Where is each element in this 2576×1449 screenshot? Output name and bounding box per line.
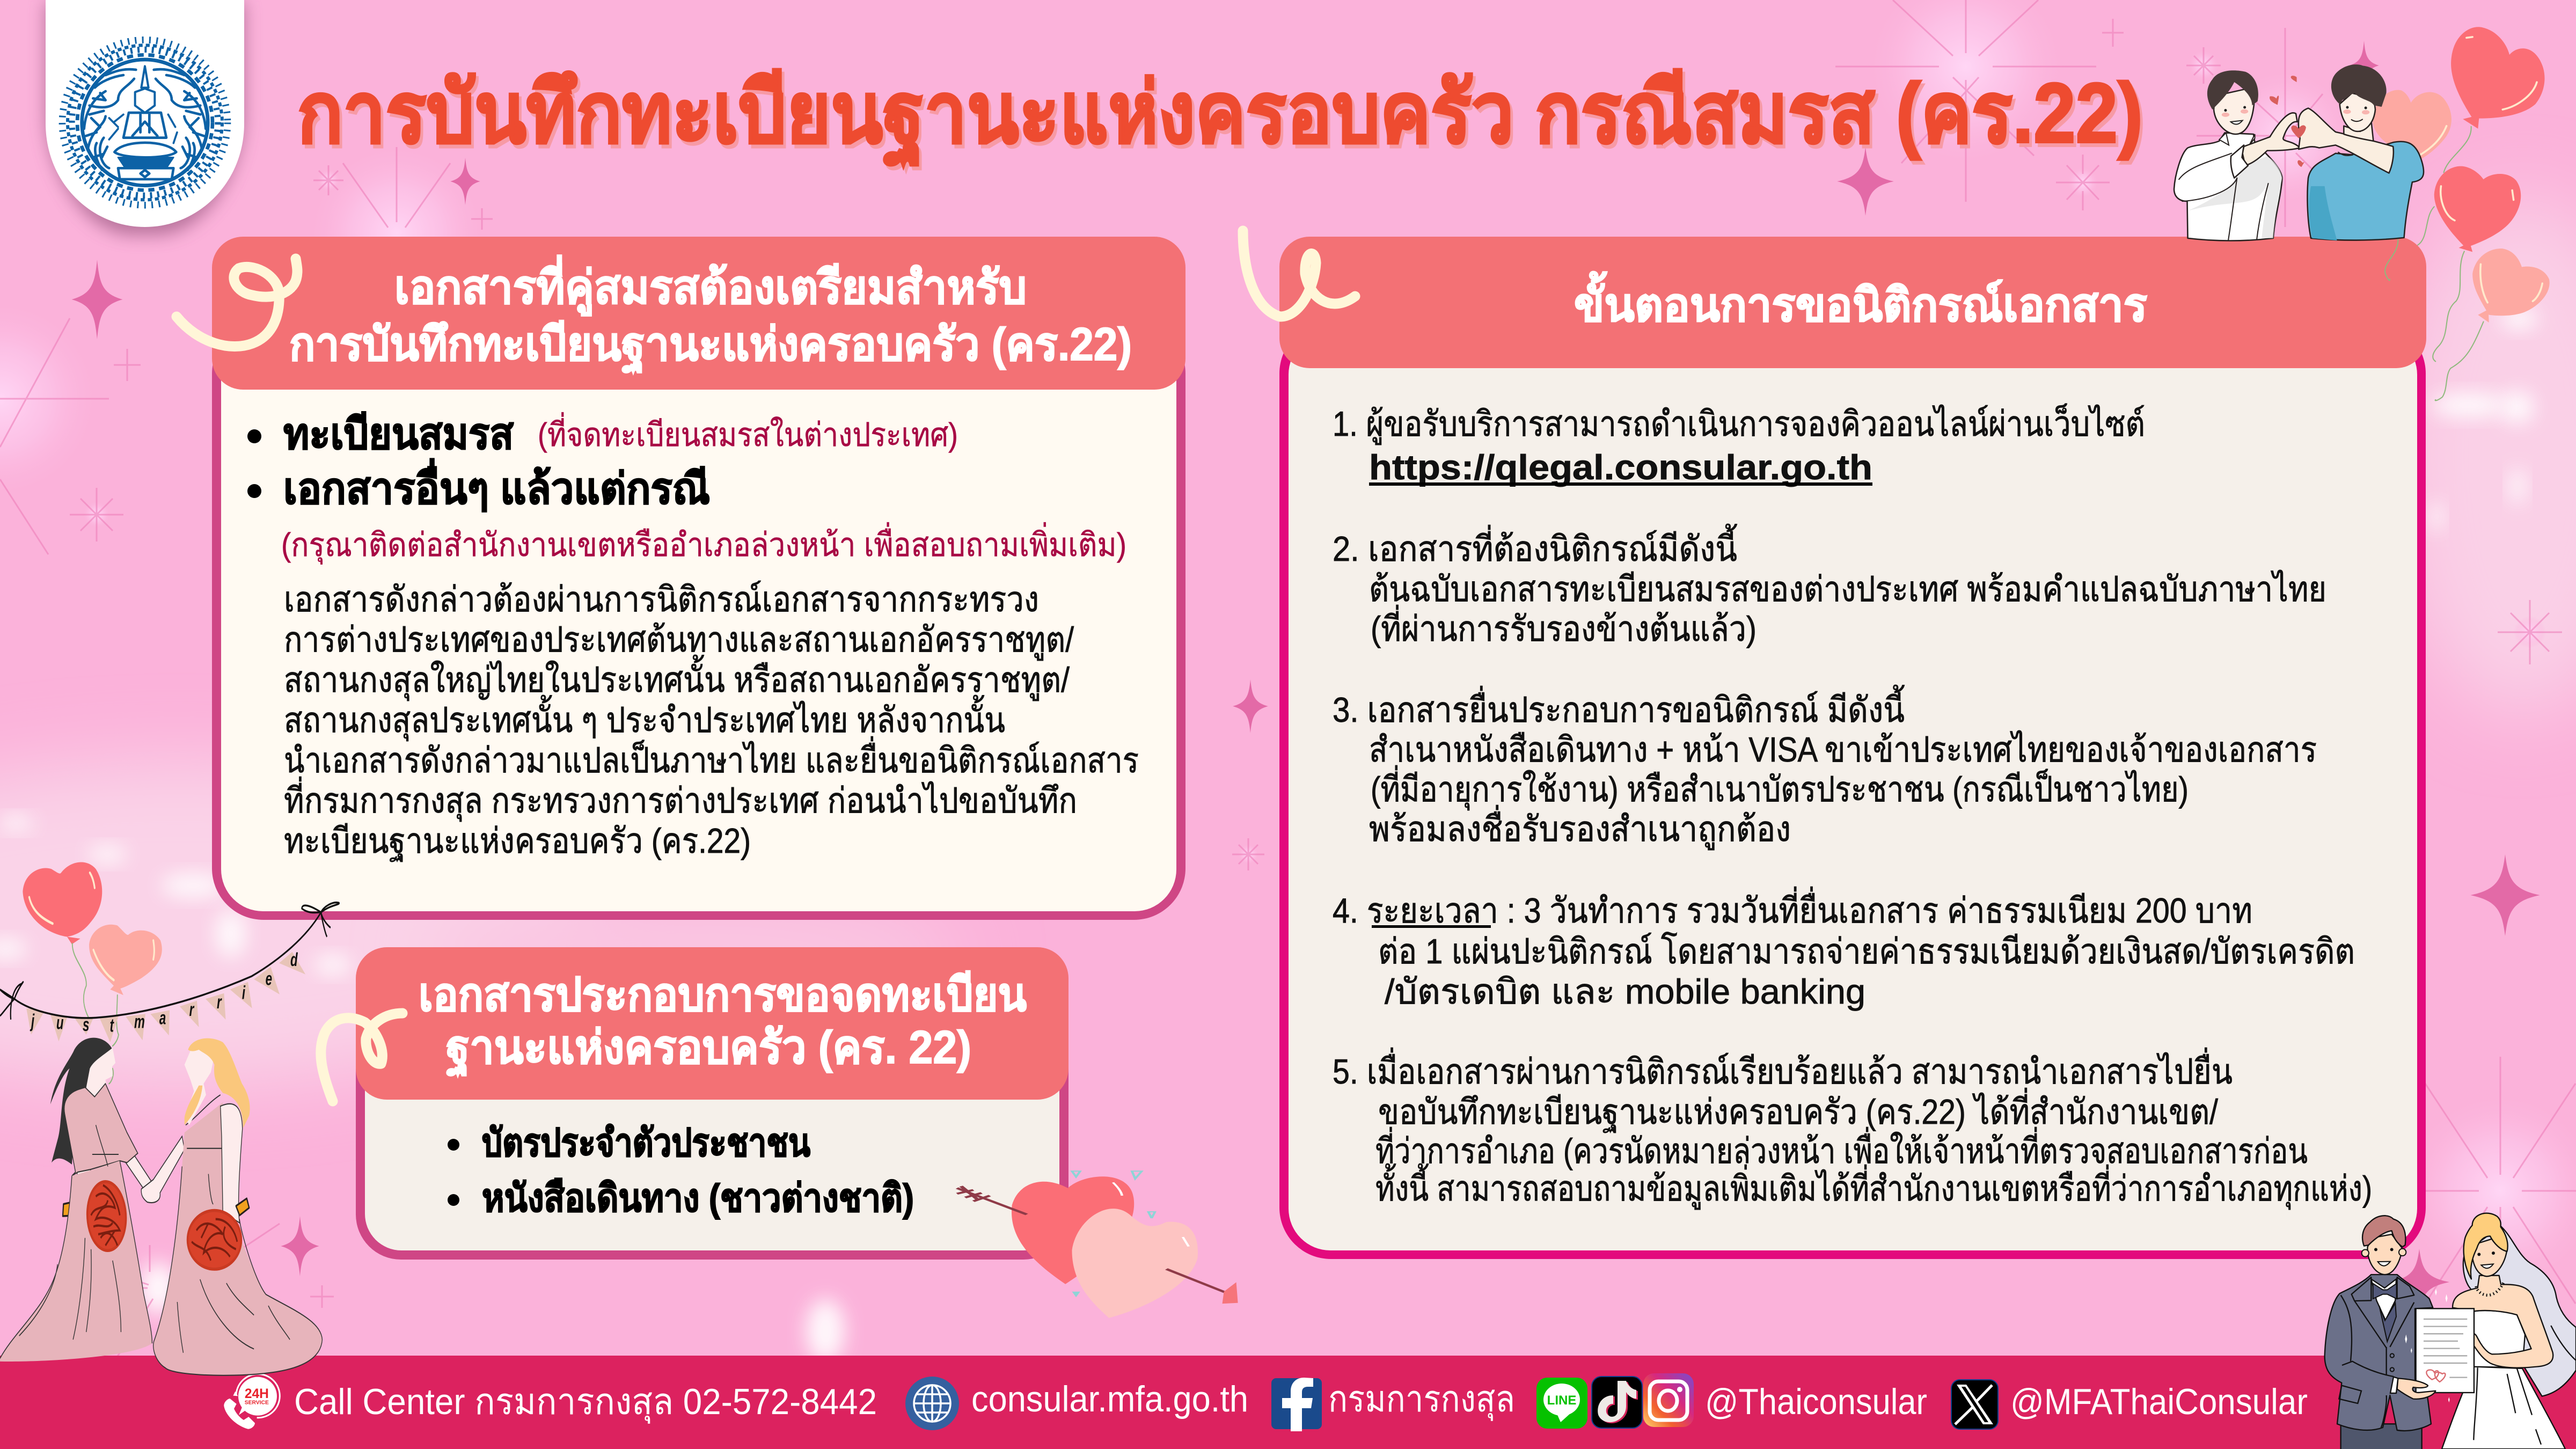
step 3: พร้อมลงชื่อรับรองสำเนาถูกต้อง	[1369, 805, 1791, 850]
icon: globe	[905, 1377, 959, 1430]
illustration: groom and bride with certificate	[2325, 1213, 2576, 1449]
step 4	[1333, 887, 2355, 1011]
step 1: 1. ผู้ขอรับบริการสามารถดำเนินการจองคิวออนไลน์ผ่านเว็บไซต์	[1333, 404, 2145, 445]
bunting: i	[242, 982, 246, 1004]
paragraph: เอกสารดังกล่าวต้องผ่านการนิติกรณ์เอกสารจากกระทรวง	[284, 580, 1039, 619]
bunting: r	[217, 992, 222, 1013]
step 3	[1333, 685, 2317, 850]
bullet list: ทะเบียนสมรส	[283, 410, 514, 458]
illustration: hearts with arrow	[957, 1171, 1238, 1318]
bullet list: (ที่จดทะเบียนสมรสในต่างประเทศ)	[538, 412, 958, 453]
logo: ministry seal	[62, 40, 228, 205]
bullet list: บัตรประจำตัวประชาชน	[482, 1122, 810, 1165]
bunting: m	[134, 1011, 145, 1033]
panel heading	[289, 254, 1132, 375]
panel heading: การบันทึกทะเบียนฐานะแห่งครอบครัว (คร.22)	[289, 319, 1132, 375]
swirl	[177, 259, 297, 347]
paragraph	[284, 580, 1139, 862]
step 2	[1333, 524, 2326, 648]
groom	[2325, 1216, 2474, 1449]
step 4: 4. ระยะเวลา : 3 วันทำการ รวมวันที่ยื่นเอกสาร ค่าธรรมเนียม 200 บาท	[1333, 887, 2252, 930]
icon: facebook	[1271, 1378, 1322, 1431]
step 2: 2. เอกสารที่ต้องนิติกรณ์มีดังนี้	[1333, 524, 1738, 568]
bullet list: เอกสารอื่นๆ แล้วแต่กรณี	[283, 458, 710, 513]
logo tab	[46, 0, 244, 235]
icon: 24h call center: 24H	[245, 1387, 269, 1401]
bride left	[0, 1038, 152, 1362]
step 5: 5. เมื่อเอกสารผ่านการนิติกรณ์เรียบร้อยแล้ว สามารถนำเอกสารไปยื่น	[1333, 1048, 2233, 1091]
panel heading: ขั้นตอนการขอนิติกรณ์เอกสาร	[1574, 271, 2147, 331]
paragraph: นำเอกสารดังกล่าวมาแปลเป็นภาษาไทย และยื่นขอนิติกรณ์เอกสาร	[284, 736, 1139, 780]
instagram handle: @Thaiconsular	[1705, 1381, 1927, 1422]
illustration: two brides with banner	[0, 862, 339, 1375]
bunting: u	[56, 1012, 64, 1034]
x handle: @MFAThaiConsular	[2010, 1381, 2308, 1422]
panel: documents couple must prepare	[177, 237, 1185, 920]
paragraph: ที่กรมการกงสุล กระทรวงการต่างประเทศ ก่อนนำไปขอบันทึก	[284, 777, 1077, 822]
bunting: j	[30, 1011, 35, 1031]
step 5: ขอบันทึกทะเบียนฐานะแห่งครอบครัว (คร.22) ได้ที่สำนักงานเขต/	[1378, 1088, 2219, 1133]
panel heading: เอกสารประกอบการขอจดทะเบียน	[419, 969, 1027, 1021]
step 2: ต้นฉบับเอกสารทะเบียนสมรสของต่างประเทศ พร้อมคำแปลฉบับภาษาไทย	[1369, 569, 2326, 609]
step 3: สำเนาหนังสือเดินทาง + หน้า VISA ขาเข้าประเทศไทยของเจ้าของเอกสาร	[1369, 730, 2317, 769]
paragraph: สถานกงสุลใหญ่ไทยในประเทศนั้น หรือสถานเอกอัครราชทูต/	[284, 655, 1070, 701]
footer bar	[0, 1356, 2576, 1449]
balloons	[2373, 27, 2550, 400]
panel heading: ฐานะแห่งครอบครัว (คร. 22)	[446, 1022, 971, 1078]
facebook name: กรมการกงสุล	[1328, 1379, 1515, 1421]
bunting: r	[189, 999, 195, 1020]
icon: line	[1536, 1378, 1587, 1429]
bunting: e	[266, 968, 272, 990]
heart balloons	[23, 862, 162, 1084]
icon: line: LINE	[1547, 1393, 1576, 1408]
paragraph: ทะเบียนฐานะแห่งครอบครัว (คร.22)	[284, 821, 751, 862]
bunting: s	[83, 1014, 89, 1035]
bullet list	[247, 410, 1126, 565]
step 5: ทั้งนี้ สามารถสอบถามข้อมูลเพิ่มเติมได้ที่สำนักงานเขตหรือที่ว่าการอำเภอทุกแห่ง)	[1375, 1163, 2372, 1210]
icon: tiktok	[1592, 1377, 1642, 1428]
icon: x	[1951, 1380, 1998, 1429]
panel: legalization steps	[1243, 231, 2426, 1259]
bride	[2442, 1213, 2576, 1449]
bunting: a	[159, 1007, 166, 1029]
paragraph: สถานกงสุลประเทศนั้น ๆ ประจำประเทศไทย หลังจากนั้น	[284, 695, 1005, 742]
groom right	[2270, 64, 2424, 240]
bride right	[141, 1038, 322, 1375]
bunting: t	[109, 1015, 114, 1036]
icon: instagram	[1643, 1373, 1694, 1427]
website text: consular.mfa.go.th	[971, 1379, 1248, 1419]
step 3: (ที่มีอายุการใช้งาน) หรือสำเนาบัตรประชาชน (กรณีเป็นชาวไทย)	[1371, 765, 2189, 811]
step 5: ที่ว่าการอำเภอ (ควรนัดหมายล่วงหน้า เพื่อให้เจ้าหน้าที่ตรวจสอบเอกสารก่อน	[1375, 1127, 2308, 1170]
bullet list: หนังสือเดินทาง (ชาวต่างชาติ)	[482, 1177, 914, 1220]
step 4: ต่อ 1 แผ่นปะนิติกรณ์ โดยสามารถจ่ายค่าธรรมเนียมด้วยเงินสด/บัตรเครดิต	[1378, 932, 2355, 971]
step 3: 3. เอกสารยื่นประกอบการขอนิติกรณ์ มีดังนี้	[1333, 685, 1905, 729]
panel: documents for registration	[321, 947, 1069, 1260]
title: การบันทึกทะเบียนฐานะแห่งครอบครัว กรณีสมรส (คร.22)	[297, 66, 2143, 169]
swirl	[1243, 231, 1355, 317]
icon: 24h call center: SERVICE	[245, 1400, 269, 1406]
step 1	[1333, 404, 2145, 487]
bunting: d	[290, 949, 298, 971]
call center text: Call Center กรมการกงสุล 02-572-8442	[294, 1381, 877, 1424]
groom left	[2174, 70, 2300, 240]
paragraph: การต่างประเทศของประเทศต้นทางและสถานเอกอัครราชทูต/	[284, 620, 1074, 661]
step 5	[1333, 1048, 2372, 1210]
step 1: https://qlegal.consular.go.th	[1369, 448, 1872, 487]
panel heading: เอกสารที่คู่สมรสต้องเตรียมสำหรับ	[394, 254, 1027, 316]
step 4: /บัตรเดบิต และ mobile banking	[1385, 972, 1865, 1011]
bullet list: (กรุณาติดต่อสำนักงานเขตหรืออำเภอล่วงหน้า เพื่อสอบถามเพิ่มเติม)	[281, 522, 1126, 565]
step 2: (ที่ผ่านการรับรองข้างต้นแล้ว)	[1371, 605, 1757, 648]
icon: 24h call center	[224, 1374, 280, 1429]
swirl	[321, 1013, 402, 1101]
panel heading	[419, 969, 1027, 1078]
illustration: two grooms with heart hands and balloons	[2174, 27, 2550, 400]
bunting	[0, 903, 339, 1042]
bullet list	[448, 1122, 914, 1220]
